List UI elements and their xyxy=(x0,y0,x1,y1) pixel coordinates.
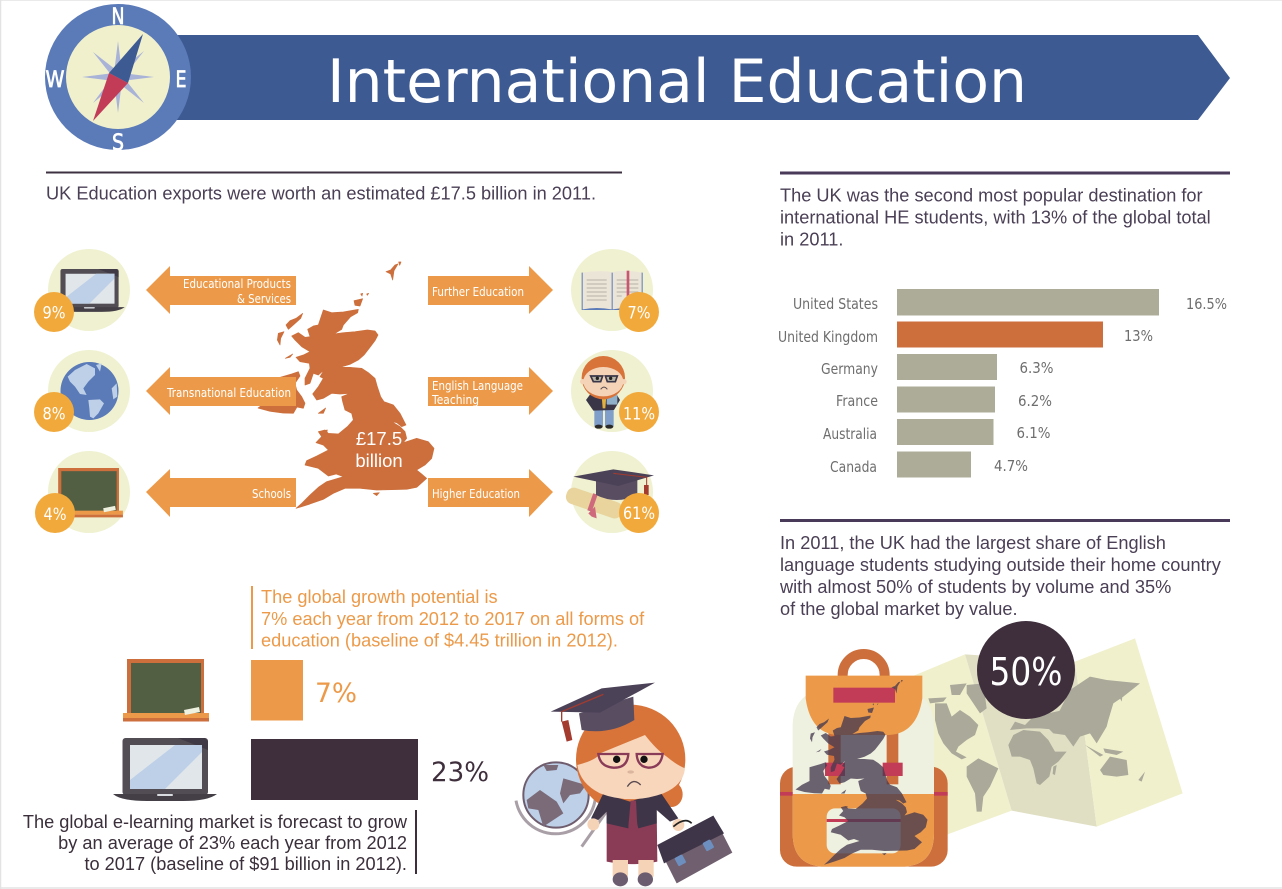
bar: Germany: 6.3% xyxy=(1020,359,1054,377)
bar: 23% growth: 23% xyxy=(431,757,489,788)
icon: blackboard 4% xyxy=(35,451,130,533)
text block: e-learning market: The global e-learning market is forecast to grow xyxy=(23,812,408,832)
bar: Germany: Germany xyxy=(821,360,878,378)
illustration: teacher with globe and briefcase xyxy=(516,683,732,886)
icon: book 7%: 7% xyxy=(628,304,650,322)
icon: compass: S xyxy=(112,131,124,156)
arrow: english language teaching xyxy=(428,367,553,415)
panel: second most popular destination heading: in 2011. xyxy=(780,230,843,250)
bar: France: France xyxy=(836,392,878,410)
arrow: educational products: & Services xyxy=(237,291,291,306)
icon: compass: E xyxy=(176,68,186,93)
panel: UK education exports heading: UK Education exports were worth an estimated £17.5 billion in 2011. xyxy=(46,184,596,204)
icon: laptop xyxy=(113,738,217,801)
icon: globe 8% xyxy=(34,350,130,432)
panel: English language students text: of the global market by value. xyxy=(780,599,1018,619)
icon: compass: N xyxy=(112,5,124,30)
bar: United Kingdom: 13% xyxy=(1124,327,1153,345)
icon: compass xyxy=(45,4,191,156)
bar: France xyxy=(836,386,1052,412)
icon: compass: W xyxy=(46,68,65,93)
text block: global growth potential xyxy=(251,586,645,650)
icon: book 7% xyxy=(571,249,659,332)
bar: United States xyxy=(793,289,1227,316)
icon: blackboard xyxy=(123,659,209,722)
arrow: english language teaching: English Language xyxy=(432,378,523,393)
bar: Australia: 6.1% xyxy=(1016,424,1050,442)
bar: United States: United States xyxy=(793,295,878,313)
text block: global growth potential: education (baseline of $4.45 trillion in 2012). xyxy=(261,630,618,650)
arrow: further education xyxy=(428,266,553,314)
bar: Canada: Canada xyxy=(830,458,877,476)
bar: Canada: 4.7% xyxy=(994,457,1028,475)
panel: English language students text xyxy=(779,519,1230,619)
bar: United States: 16.5% xyxy=(1186,295,1227,313)
arrow: higher education xyxy=(428,469,553,517)
UK map with total: billion xyxy=(355,450,403,471)
callout: 50%: 50% xyxy=(990,650,1062,694)
title: International Education xyxy=(327,47,1027,117)
bar: United Kingdom xyxy=(778,322,1153,348)
illustration: backpack with UK map xyxy=(780,654,948,867)
arrow: educational products xyxy=(146,266,296,314)
panel: second most popular destination heading: international HE students, with 13% of the global total xyxy=(780,208,1211,228)
bar: Australia xyxy=(823,419,1050,445)
panel: English language students text: In 2011, the UK had the largest share of English xyxy=(780,533,1166,553)
arrow: schools: Schools xyxy=(252,486,291,501)
bar: Australia: Australia xyxy=(823,425,877,443)
bar: 7% growth: 7% xyxy=(315,678,357,709)
bar: 7% growth xyxy=(251,660,357,720)
title banner xyxy=(150,35,1230,120)
icon: globe 8%: 8% xyxy=(42,404,66,424)
bar: Canada xyxy=(830,452,1028,478)
arrow: transnational education: Transnational Education xyxy=(166,385,291,400)
panel: second most popular destination heading xyxy=(780,172,1230,250)
icon: blackboard 4%: 4% xyxy=(44,505,66,524)
arrow: educational products: Educational Products xyxy=(183,276,291,291)
UK map with total: £17.5 xyxy=(356,428,402,449)
bar chart: international HE students xyxy=(778,289,1227,478)
icon: laptop 9%: 9% xyxy=(42,304,66,322)
panel: second most popular destination heading: The UK was the second most popular destination for xyxy=(780,186,1203,206)
text block: e-learning market xyxy=(23,810,417,874)
panel: English language students text: language students studying outside their home country xyxy=(780,555,1222,575)
icon: graduation cap and diploma 61% xyxy=(564,451,659,533)
icon: teacher 11%: 11% xyxy=(623,404,655,424)
text block: global growth potential: The global growth potential is xyxy=(261,587,498,607)
callout: 50% xyxy=(977,621,1075,719)
text block: e-learning market: to 2017 (baseline of $91 billion in 2012). xyxy=(84,854,407,874)
arrow: higher education: Higher Education xyxy=(432,486,520,501)
icon: graduation cap and diploma 61%: 61% xyxy=(623,504,655,523)
bar: United Kingdom: United Kingdom xyxy=(778,328,878,346)
arrow: english language teaching: Teaching xyxy=(431,392,479,407)
icon: teacher 11% xyxy=(571,350,659,432)
arrow: further education: Further Education xyxy=(432,284,524,299)
bar: Germany xyxy=(821,354,1054,380)
text block: e-learning market: by an average of 23% each year from 2012 xyxy=(58,833,407,853)
bar: France: 6.2% xyxy=(1018,392,1052,410)
UK map with total xyxy=(258,262,434,508)
arrow: transnational education xyxy=(146,367,296,415)
arrow: schools xyxy=(146,469,296,517)
text block: global growth potential: 7% each year from 2012 to 2017 on all forms of xyxy=(261,609,645,629)
icon: laptop 9% xyxy=(34,249,130,332)
illustration: folded world map xyxy=(903,638,1183,838)
panel: English language students text: with almost 50% of students by volume and 35% xyxy=(779,577,1171,597)
bar: 23% growth xyxy=(251,739,489,800)
